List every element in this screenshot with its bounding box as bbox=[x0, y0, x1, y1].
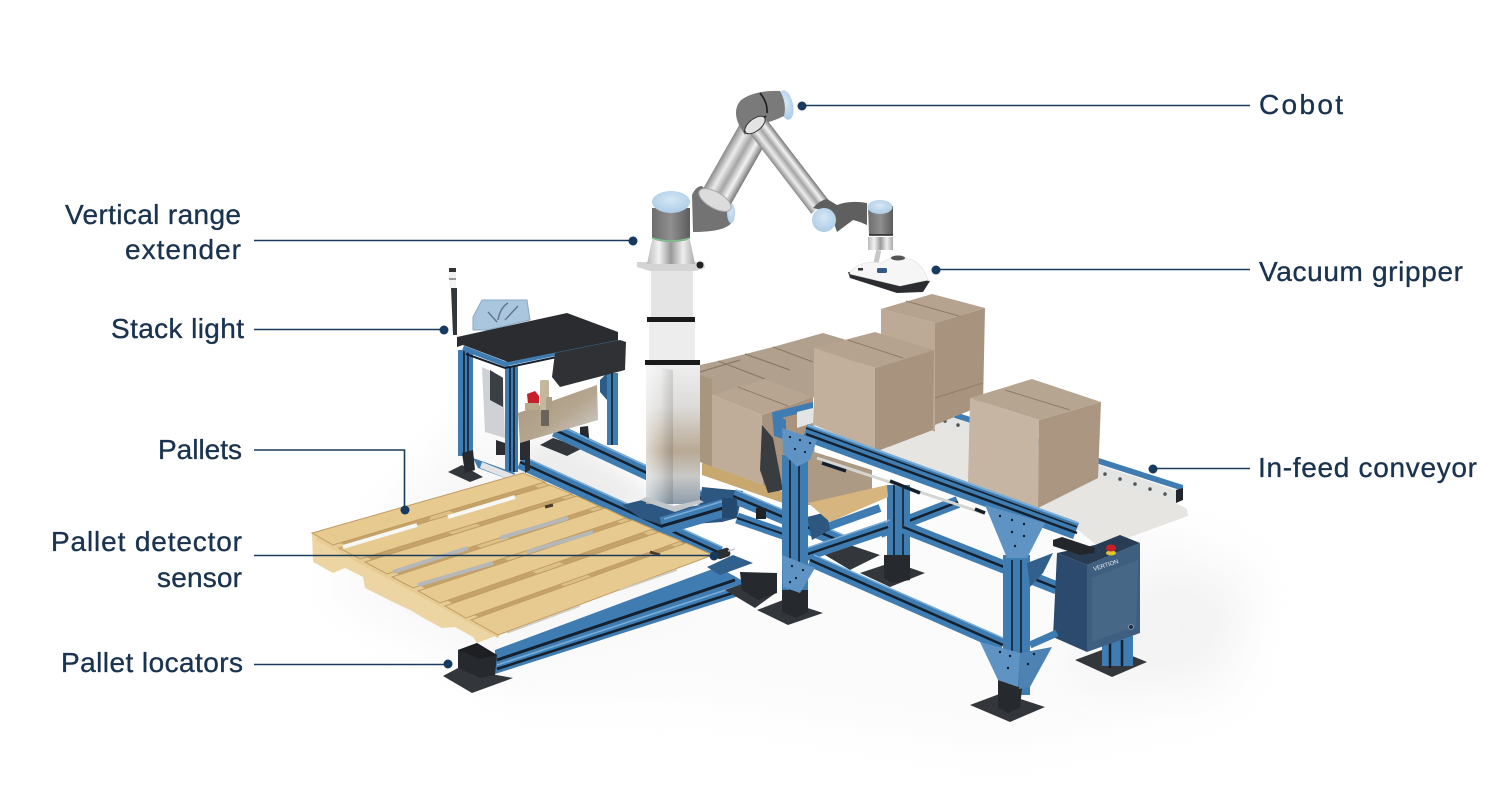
pallet load boxes bbox=[700, 333, 880, 505]
callout: pallet detector sensor bbox=[51, 526, 718, 593]
front pallet box bbox=[712, 395, 763, 485]
back box side bbox=[700, 375, 712, 467]
big box on conveyor bbox=[814, 332, 934, 452]
lower box behind conveyor bbox=[808, 450, 872, 505]
silver panel bbox=[518, 385, 598, 443]
wooden pallet under boxes bbox=[702, 463, 888, 522]
blue cap behind cabinet bbox=[473, 300, 530, 330]
shoulder blue cap bbox=[727, 203, 735, 223]
callout: pallet locators bbox=[61, 647, 452, 678]
pallet detector sensor bbox=[715, 547, 735, 560]
callout: vertical range extender bbox=[65, 199, 638, 265]
tall stacked boxes bbox=[881, 294, 985, 432]
enclosure side bbox=[1053, 553, 1087, 652]
emergency stop bbox=[1106, 544, 1116, 556]
conveyor left end bbox=[760, 402, 813, 493]
callout: pallets bbox=[158, 434, 410, 514]
conveyor belt bbox=[810, 415, 1188, 548]
callout: pallet locators: Pallet locators bbox=[61, 647, 243, 678]
callout: in-feed conveyor bbox=[1148, 452, 1477, 483]
back box tops bbox=[700, 333, 880, 400]
callout: cobot: Cobot bbox=[1259, 89, 1343, 120]
pallet deck boards bbox=[312, 473, 713, 635]
callout: in-feed conveyor: In-feed conveyor bbox=[1258, 452, 1477, 483]
brand: VERTION bbox=[1093, 559, 1119, 573]
wrist joints bbox=[813, 199, 867, 232]
cabinet feet bbox=[448, 450, 515, 482]
pallet deck base bbox=[312, 473, 713, 635]
corner block and foot plate bbox=[443, 643, 513, 693]
mid and back conveyor frame bbox=[805, 485, 1057, 588]
flange bbox=[637, 240, 705, 271]
forearm tube bbox=[749, 119, 829, 214]
air regulator bbox=[525, 380, 552, 426]
front right leg bbox=[970, 505, 1057, 722]
pallet locator beam bbox=[495, 567, 745, 674]
locator end block bbox=[707, 555, 777, 608]
base cap bbox=[652, 191, 690, 213]
callout: cobot bbox=[798, 89, 1343, 120]
callout: stack light: Stack light bbox=[111, 313, 244, 344]
stack light bbox=[449, 268, 457, 335]
callout: vertical range extender: Vertical range bbox=[65, 199, 241, 230]
callout: pallet detector sensor: sensor bbox=[157, 562, 242, 593]
callout: vacuum gripper bbox=[932, 256, 1463, 287]
elbow cap bbox=[776, 89, 796, 121]
conveyor front rail bbox=[805, 425, 1095, 555]
base joint bbox=[652, 208, 690, 242]
callout: stack light bbox=[111, 313, 448, 344]
black storage box bbox=[552, 340, 626, 387]
callout: vacuum gripper: Vacuum gripper bbox=[1259, 256, 1463, 287]
pallet gaps bbox=[343, 497, 515, 547]
floor shadows bbox=[330, 420, 1260, 750]
conveyor back rail bbox=[933, 405, 1183, 503]
shoulder joint bbox=[692, 186, 732, 232]
elbow joint bbox=[736, 91, 785, 135]
callout: vertical range extender: extender bbox=[125, 234, 241, 265]
wooden pallet bbox=[312, 473, 713, 643]
callout: pallet detector sensor: Pallet detector bbox=[51, 526, 242, 557]
electrical enclosure bbox=[482, 367, 505, 438]
callout: pallets: Pallets bbox=[158, 434, 242, 465]
cobot arm bbox=[637, 89, 893, 271]
pallet side bbox=[312, 533, 505, 643]
enclosure front bbox=[1087, 543, 1140, 652]
front box on conveyor bbox=[968, 379, 1101, 508]
front cabinet legs bbox=[458, 340, 618, 472]
vertical range extender column bbox=[640, 268, 704, 512]
vacuum gripper bbox=[848, 256, 930, 293]
table top bbox=[457, 313, 618, 362]
cabinet stand bbox=[448, 313, 626, 482]
front left leg bbox=[757, 428, 1003, 645]
rear cabinet legs bbox=[496, 373, 618, 473]
control box bbox=[1053, 535, 1147, 677]
upper arm tube bbox=[701, 124, 767, 208]
rear base frame bbox=[520, 425, 958, 553]
pallet stringers bbox=[318, 536, 500, 634]
